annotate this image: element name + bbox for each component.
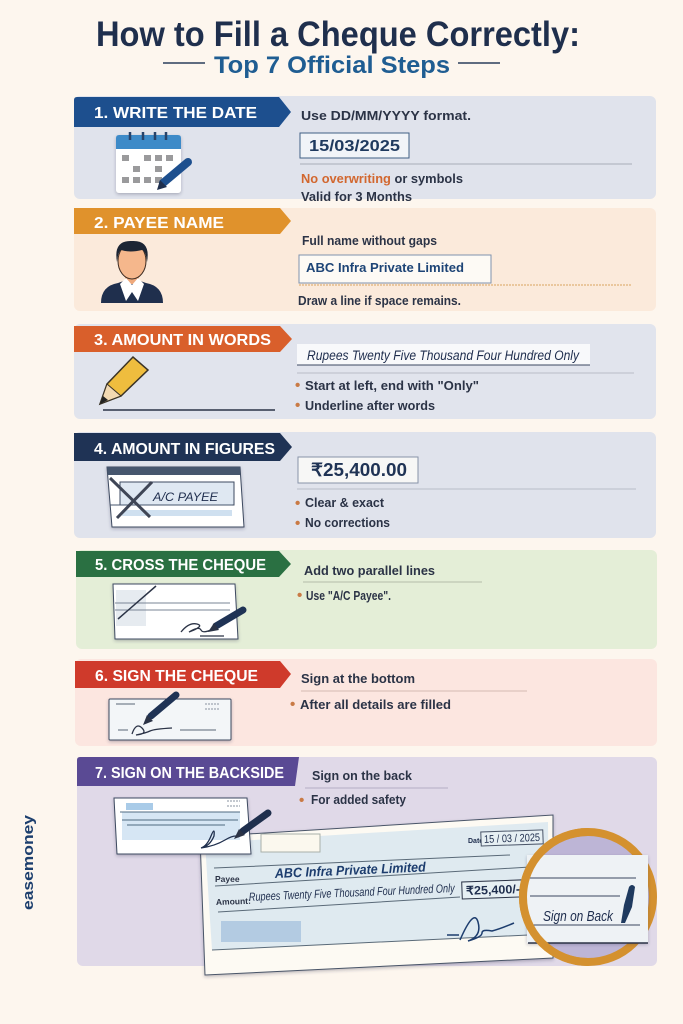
text: figures instructions: No corrections bbox=[305, 515, 390, 530]
text: payee instructions: Draw a line if space remains. bbox=[298, 293, 461, 308]
text: words instructions: Underline after words bbox=[305, 398, 435, 413]
text: date instructions: No overwriting or symbols bbox=[301, 171, 463, 186]
panel: step 5 cross the cheque bbox=[76, 550, 657, 649]
large cheque: ABC Infra Private Limited bbox=[274, 859, 427, 881]
text: figures instructions: Clear & exact bbox=[305, 495, 385, 510]
panel: step 4 amount in figures bbox=[74, 432, 656, 538]
text: crossing instructions: Use "A/C Payee". bbox=[306, 588, 391, 603]
text: words instructions: • bbox=[295, 377, 300, 394]
text: back signing instructions: • bbox=[299, 792, 304, 809]
banner: step 6: 6. SIGN THE CHEQUE bbox=[95, 668, 258, 685]
icon: A/C payee crossing: A/C PAYEE bbox=[152, 490, 219, 504]
text: signing instructions: Sign at the bottom bbox=[301, 671, 415, 686]
banner: step 7: 7. SIGN ON THE BACKSIDE bbox=[95, 765, 284, 782]
large cheque: ₹25,400/- bbox=[466, 882, 520, 898]
text: crossing instructions bbox=[297, 563, 482, 604]
text: figures instructions: • bbox=[295, 515, 300, 532]
text: crossing instructions: • bbox=[297, 587, 302, 604]
text: date instructions: Use DD/MM/YYYY format. bbox=[301, 108, 471, 123]
text: words instructions: • bbox=[295, 397, 300, 414]
large cheque bbox=[200, 815, 553, 975]
text: figures instructions bbox=[295, 457, 636, 532]
magnifier: sign on back bbox=[523, 832, 653, 962]
text: figures instructions: • bbox=[295, 495, 300, 512]
text: words instructions: Rupees Twenty Five Thousand Four Hundred Only bbox=[307, 348, 580, 363]
text: back signing instructions bbox=[299, 768, 448, 809]
panel: step 2 payee name bbox=[74, 208, 656, 311]
logo: easemoney: easemoney bbox=[20, 814, 37, 910]
icon: crossed cheque with pen bbox=[113, 584, 243, 639]
banner: step 7 bbox=[77, 757, 299, 786]
text: signing instructions: • bbox=[290, 696, 295, 713]
banner: step 2 bbox=[74, 208, 291, 234]
panel: step 1 write the date bbox=[74, 96, 656, 204]
text: words instructions bbox=[295, 344, 634, 414]
panel: step 7 sign on the backside bbox=[77, 757, 657, 975]
icon: pencil bbox=[100, 357, 275, 410]
title: How to Fill a Cheque Correctly: bbox=[96, 15, 580, 54]
text: back signing instructions: For added safety bbox=[311, 792, 407, 807]
banner: step 5: 5. CROSS THE CHEQUE bbox=[95, 557, 266, 574]
panel: step 6 sign the cheque bbox=[75, 659, 657, 746]
large cheque: Date bbox=[468, 838, 483, 845]
banner: step 1: 1. WRITE THE DATE bbox=[94, 105, 257, 122]
magnifier: sign on back: Sign on Back bbox=[543, 908, 614, 925]
text: payee instructions: ABC Infra Private Limited bbox=[306, 260, 464, 275]
text: payee instructions: Full name without gaps bbox=[302, 233, 437, 248]
text: date instructions: 15/03/2025 bbox=[309, 138, 400, 155]
icon: calendar with pen bbox=[116, 132, 188, 193]
text: payee instructions bbox=[298, 233, 632, 308]
banner: step 1 bbox=[74, 97, 291, 127]
banner: step 4: 4. AMOUNT IN FIGURES bbox=[94, 441, 275, 458]
text: figures instructions: ₹25,400.00 bbox=[311, 460, 407, 480]
banner: step 3 bbox=[74, 326, 292, 352]
text: date instructions: Valid for 3 Months bbox=[301, 189, 412, 204]
text: words instructions: Start at left, end with "Only" bbox=[305, 378, 479, 393]
text: back signing instructions: Sign on the back bbox=[312, 768, 413, 783]
banner: step 6 bbox=[75, 661, 291, 688]
small cheque back with pen bbox=[114, 798, 268, 854]
subtitle: Top 7 Official Steps bbox=[214, 52, 450, 79]
banner: step 4 bbox=[74, 433, 292, 461]
icon: A/C payee crossing bbox=[107, 467, 244, 527]
text: crossing instructions: Add two parallel lines bbox=[304, 563, 435, 578]
text: signing instructions: After all details are filled bbox=[300, 697, 451, 712]
panel: step 3 amount in words bbox=[74, 324, 656, 419]
banner: step 3: 3. AMOUNT IN WORDS bbox=[94, 332, 271, 349]
banner: step 5 bbox=[76, 551, 291, 577]
large cheque: 15 / 03 / 2025 bbox=[484, 832, 540, 846]
large cheque: Rupees Twenty Five Thousand Four Hundred Only bbox=[249, 881, 456, 904]
icon: person bbox=[101, 241, 163, 303]
banner: step 2: 2. PAYEE NAME bbox=[94, 215, 224, 232]
text: date instructions bbox=[300, 108, 632, 204]
icon: cheque with pen signing bbox=[109, 695, 231, 740]
large cheque: Payee bbox=[215, 874, 240, 884]
text: signing instructions bbox=[290, 671, 527, 713]
large cheque: Amount: bbox=[216, 896, 251, 907]
